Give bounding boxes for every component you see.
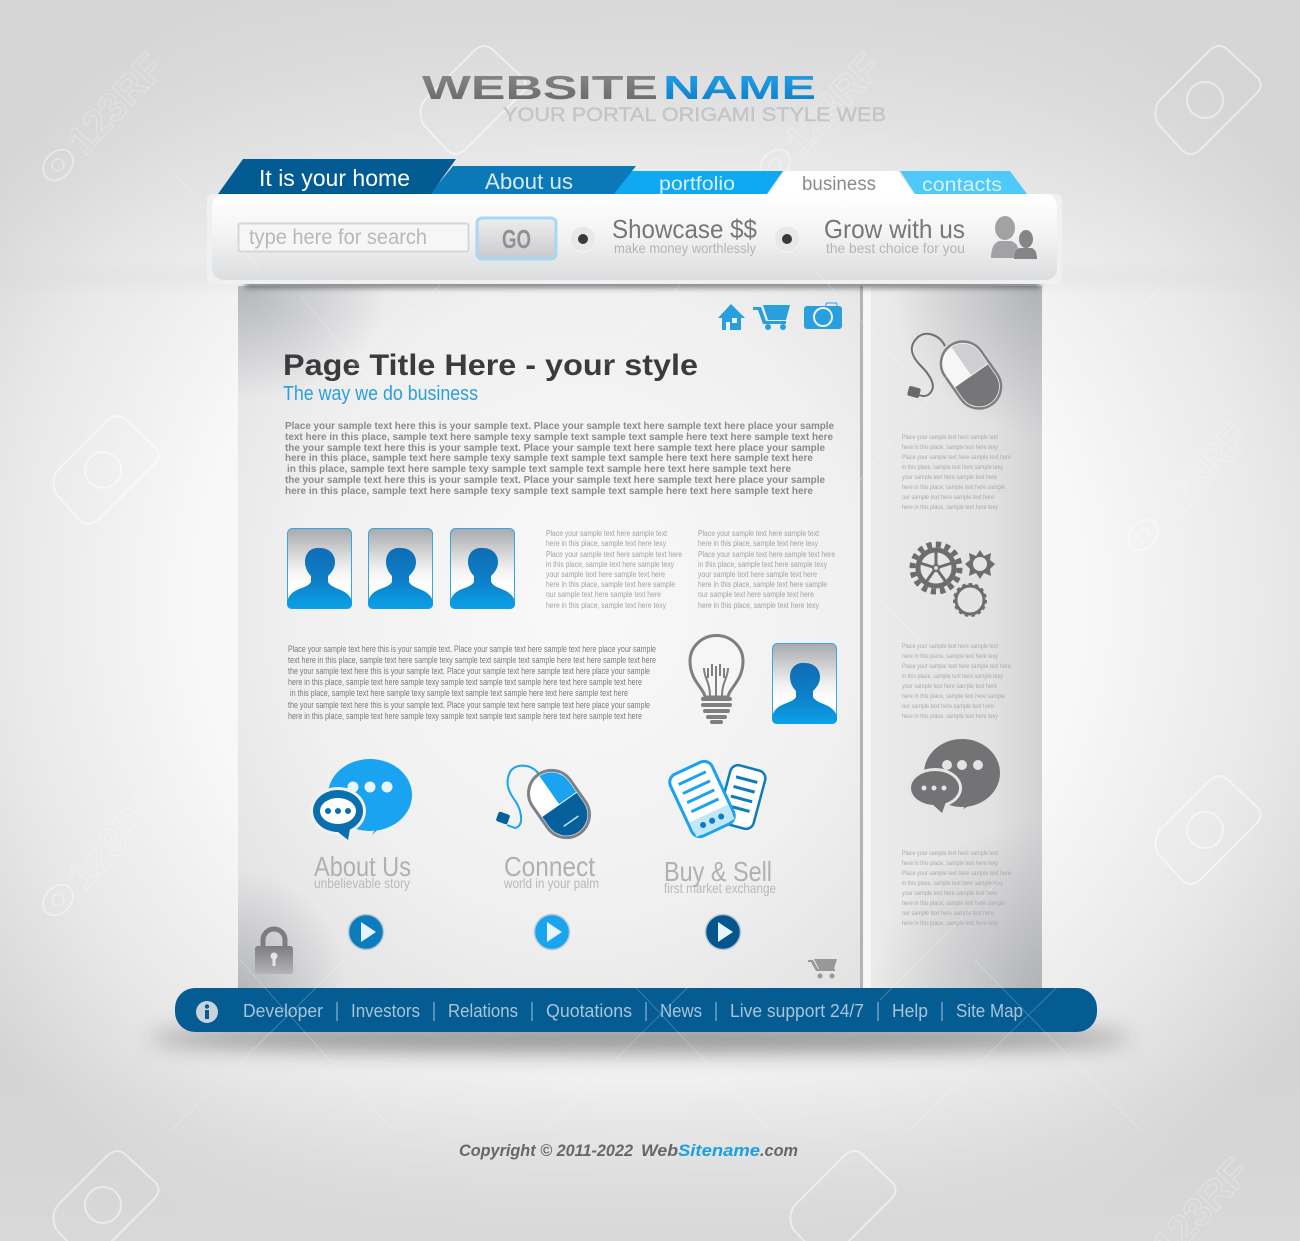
intro paragraph: the your sample text here this is your sample text. Place your sample text here sample text here place your sample [285, 443, 825, 454]
sidebar text 1: Place your sample text here sample text here [902, 454, 1011, 461]
text column 1: our sample text here sample text here [546, 590, 661, 599]
second paragraph: the your sample text here this is your sample text. Place your sample text here sample text here place your sample [288, 666, 650, 676]
tab: business [768, 171, 915, 196]
footer links [243, 1001, 1023, 1021]
go button [477, 218, 556, 259]
text column 2: Place your sample text here sample text [698, 529, 820, 538]
tab: portfolio [613, 171, 783, 195]
icon: blue mouse [496, 761, 598, 847]
tab: contacts [900, 171, 1027, 196]
text column 2: here in this place, sample text here texy [698, 601, 819, 610]
sidebar text 2: here in this place, sample text here texy [902, 653, 999, 660]
intro paragraph: here in this place, sample text here sample texy sample text sample text sample here text here sample text here [285, 453, 813, 464]
sidebar text 2: here in this place, sample text here texy [902, 713, 999, 720]
search input: type here for search [249, 226, 427, 249]
tab: about us [430, 166, 636, 194]
play button 1 [348, 914, 384, 950]
text column 1 [546, 529, 682, 610]
text column 2: here in this place, sample text here sample [698, 580, 827, 589]
sidebar panel [860, 286, 1042, 988]
sidebar text 2 [902, 643, 1011, 720]
second paragraph [288, 644, 656, 721]
watermark pattern: 123RF [59, 780, 173, 898]
sidebar text 3: your sample text here sample text here [902, 890, 997, 897]
second paragraph: the your sample text here this is your sample text. Place your sample text here sample text here place your sample [288, 700, 650, 710]
logo: website name [422, 69, 816, 106]
sidebar text 1: in this place, sample text here sample texy [902, 464, 1004, 471]
label: connect: Connect [504, 851, 595, 882]
sidebar text 1: your sample text here sample text here [902, 474, 997, 481]
sidebar text 1: here in this place, sample text here texy [902, 504, 999, 511]
intro paragraph: in this place, sample text here sample texy sample text sample text sample here text here sample text here [287, 464, 791, 475]
copyright line: Copyright © 2011-2022 [459, 1141, 634, 1160]
footer links: Quotations [546, 1001, 632, 1021]
text column 2: our sample text here sample text here [698, 590, 814, 599]
label: about us [314, 851, 411, 891]
tab: home: It is your home [259, 165, 410, 191]
watermark pattern: 123RF [59, 45, 173, 163]
icon: grey mouse [907, 333, 1010, 417]
footer links: Help [892, 1001, 928, 1021]
text column 2: here in this place, sample text here texy [698, 539, 818, 548]
sidebar text 3: here in this place, sample text here sample [902, 900, 1005, 907]
sidebar text 3: our sample text here sample text here [902, 910, 994, 917]
sidebar text 1: Place your sample text here sample text [902, 434, 998, 441]
tab: business: business [802, 174, 876, 195]
main content panel [238, 286, 954, 988]
label: buy and sell [664, 856, 776, 896]
showcase label: make money worthlessly [614, 240, 756, 256]
icon: home [718, 304, 745, 330]
watermark pattern: 123RF [776, 45, 890, 163]
icon: info [196, 1001, 218, 1023]
footer links: Site Map [956, 1001, 1023, 1021]
sidebar text 2: here in this place, sample text here sample [902, 693, 1005, 700]
second paragraph: text here in this place, sample text here sample texy sample text sample text sample here text here sample text here [288, 655, 656, 665]
showcase label: Showcase $$ [612, 214, 757, 244]
icon: blue documents [667, 758, 767, 840]
icon: cart [753, 305, 790, 330]
sidebar text 1: here in this place, sample text here texy [902, 444, 999, 451]
navigation tabs [218, 159, 1027, 196]
second paragraph: Place your sample text here this is your sample text. Place your sample text here sample text here place your sample [288, 644, 656, 654]
play button 3 [706, 914, 740, 950]
footer links: Developer [243, 1001, 323, 1021]
text column 2 [698, 529, 835, 610]
tab: about us: About us [485, 169, 573, 194]
tab: home [218, 159, 456, 194]
text column 1: here in this place, sample text here texy [546, 539, 666, 548]
label: connect: world in your palm [503, 875, 599, 891]
page subtitle: The way we do business [283, 383, 478, 405]
footer navigation bar [175, 988, 1097, 1032]
sidebar text 3: Place your sample text here sample text [902, 850, 998, 857]
logo: website name: NAME [663, 69, 816, 106]
intro paragraph: the your sample text here this is your sample text. Place your sample text here sample text here place your sample [285, 475, 825, 486]
second paragraph: here in this place, sample text here sample texy sample text sample text sample here text here sample text here [288, 711, 642, 721]
icon: people [991, 216, 1037, 259]
intro paragraph: text here in this place, sample text here sample texy sample text sample text sample here text here sample text here [285, 432, 833, 443]
portrait 3 [450, 528, 515, 609]
sidebar text 3 [902, 850, 1011, 927]
text column 1: in this place, sample text here sample texy [546, 560, 674, 569]
copyright line: Sitename [678, 1141, 760, 1160]
icon: camera [804, 303, 842, 329]
intro paragraph: Place your sample text here this is your sample text. Place your sample text here sample text here place your sample [285, 421, 834, 432]
portrait 4 [772, 644, 837, 724]
bullet icon [570, 226, 596, 252]
icon: grey chat bubbles [908, 739, 1000, 813]
grow label: Grow with us [824, 214, 965, 244]
second paragraph: here in this place, sample text here sample texy sample text sample text sample here text here sample text here [288, 677, 642, 687]
text column 2: Place your sample text here sample text here [698, 550, 835, 559]
footer links: Live support 24/7 [730, 1001, 864, 1021]
tab: contacts: contacts [922, 175, 1002, 196]
label: about us: unbelievable story [314, 875, 410, 891]
text column 2: in this place, sample text here sample texy [698, 560, 827, 569]
sidebar text 1 [902, 434, 1011, 511]
footer shadow [150, 1023, 1130, 1053]
grow label [824, 214, 965, 256]
sidebar text 1: our sample text here sample text here [902, 494, 994, 501]
watermark pattern: 123RF [1144, 415, 1258, 533]
logo tagline: YOUR PORTAL ORIGAMI STYLE WEB [503, 105, 886, 126]
play button 2 [534, 914, 570, 950]
text column 1: your sample text here sample text here [546, 570, 665, 579]
sidebar text 3: Place your sample text here sample text here [902, 870, 1011, 877]
go button: GO [502, 224, 531, 254]
copyright line: .com [760, 1141, 798, 1160]
copyright line: Web [641, 1141, 678, 1160]
icon: blue chat bubbles [310, 759, 412, 840]
footer links: Investors [351, 1001, 420, 1021]
text column 1: here in this place, sample text here sample [546, 580, 675, 589]
sidebar text 3: here in this place, sample text here texy [902, 860, 999, 867]
label: buy and sell: first market exchange [664, 880, 776, 896]
text column 1: here in this place, sample text here texy [546, 601, 666, 610]
sidebar text 2: in this place, sample text here sample texy [902, 673, 1004, 680]
search input [238, 224, 468, 252]
sidebar text 3: here in this place, sample text here texy [902, 920, 999, 927]
portrait 2 [368, 528, 433, 609]
showcase label [612, 214, 757, 256]
icon: padlock [255, 929, 293, 974]
portrait 1 [287, 528, 352, 609]
footer links: News [660, 1001, 702, 1021]
sidebar text 2: Place your sample text here sample text [902, 643, 998, 650]
page title: Page Title Here - your style [283, 349, 698, 382]
second paragraph: in this place, sample text here sample texy sample text sample text sample here text here sample text here [290, 688, 628, 698]
label: about us: About Us [314, 851, 411, 882]
text column 1: Place your sample text here sample text here [546, 550, 682, 559]
intro paragraph [285, 421, 834, 497]
sidebar text 3: in this place, sample text here sample texy [902, 880, 1004, 887]
sidebar text 2: your sample text here sample text here [902, 683, 997, 690]
bullet icon [774, 226, 800, 252]
text column 2: your sample text here sample text here [698, 570, 817, 579]
grow label: the best choice for you [826, 240, 965, 256]
tab: portfolio: portfolio [659, 174, 735, 195]
sidebar text 2: Place your sample text here sample text here [902, 663, 1011, 670]
search toolbar [207, 194, 1062, 288]
text column 1: Place your sample text here sample text [546, 529, 668, 538]
label: buy and sell: Buy & Sell [664, 856, 772, 887]
icon: small cart [808, 959, 837, 978]
logo: website name: WEBSITE [422, 69, 658, 106]
sidebar text 2: our sample text here sample text here [902, 703, 994, 710]
footer links: Relations [448, 1001, 518, 1021]
icon: light bulb [690, 636, 743, 722]
intro paragraph: here in this place, sample text here sample texy sample text sample text sample here text here sample text here [285, 486, 813, 497]
sidebar text 1: here in this place, sample text here sample [902, 484, 1005, 491]
icon: gears [912, 544, 995, 616]
top right icons [718, 303, 842, 330]
